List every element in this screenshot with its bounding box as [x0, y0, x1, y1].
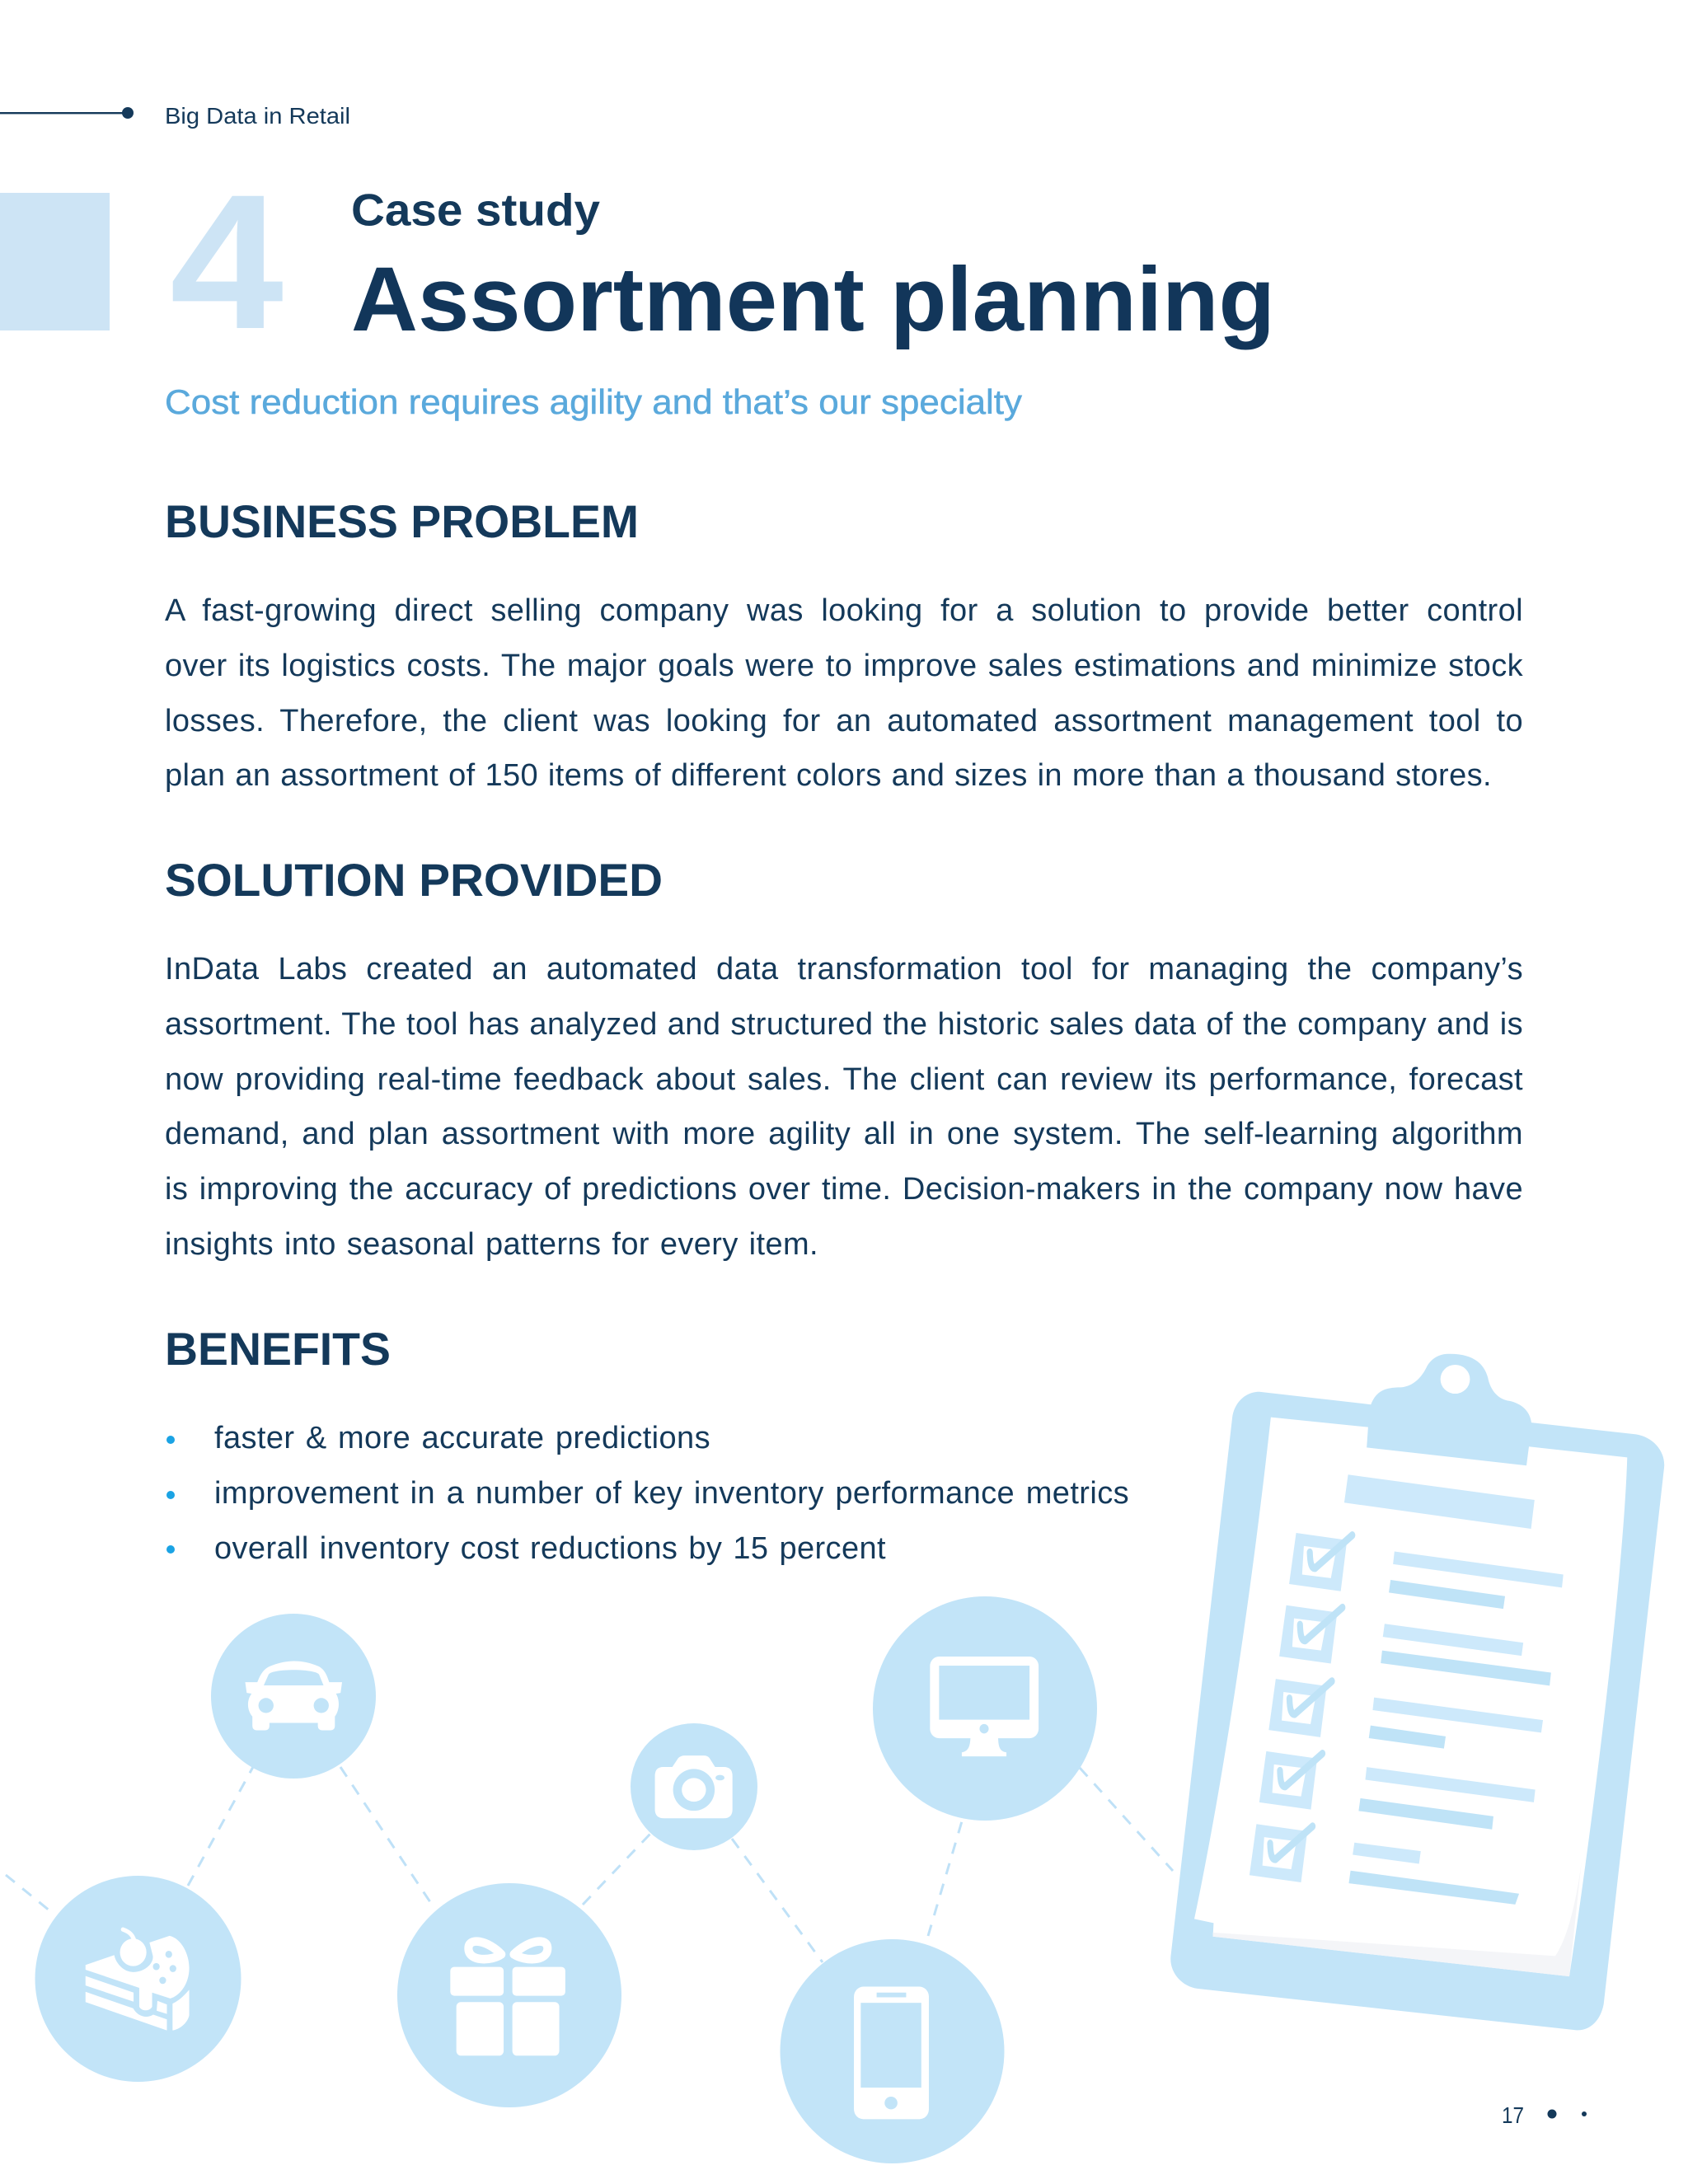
chapter marker square [0, 193, 110, 330]
text block: business problem [165, 593, 1523, 793]
text block: solution provided: insights into seasonal patterns for every item. [165, 1227, 818, 1262]
running header with line and dot [0, 103, 350, 129]
paper sheet [1194, 1418, 1627, 1976]
page number with dots [1502, 2102, 1587, 2128]
text block: solution provided: now providing real-time feedback about sales. The client can review its performance, forecast [165, 1062, 1523, 1097]
heading: business problem: BUSINESS PROBLEM [165, 495, 639, 547]
text block: business problem: losses. Therefore, the client was looking for an automated assortment management tool to [165, 704, 1523, 738]
sheet heading bar [1344, 1474, 1535, 1529]
benefits bullet list: overall inventory cost reductions by 15 percent [214, 1531, 886, 1566]
heading: benefits: BENEFITS [165, 1323, 391, 1375]
icon circle: cake [35, 1876, 241, 2082]
text block: business problem: plan an assortment of 150 items of different colors and sizes in more than a thousand stores. [165, 758, 1492, 793]
checkboxes with check marks [1250, 1533, 1353, 1882]
subtitle: Cost reduction requires agility and that’s our specialty [165, 382, 1022, 421]
icon circle: camera [631, 1723, 757, 1850]
text block: business problem: A fast-growing direct selling company was looking for a solution to provide better control [165, 593, 1523, 628]
kicker: case study: Case study [351, 185, 600, 236]
text block: solution provided: assortment. The tool has analyzed and structured the historic sales data of the company and is [165, 1007, 1523, 1042]
checklist item lines [1348, 1551, 1564, 1905]
title: Assortment planning [351, 249, 1275, 350]
text block: business problem: over its logistics costs. The major goals were to improve sales estimations and minimize stock [165, 649, 1523, 683]
dashed network connectors [6, 1767, 1173, 1962]
text block: solution provided: is improving the accuracy of predictions over time. Decision-makers in the company now have [165, 1172, 1523, 1207]
text block: solution provided: InData Labs created an automated data transformation tool for managing the company’s [165, 952, 1523, 987]
clipboard board and clip [1170, 1354, 1664, 2030]
icon circle: gift [397, 1883, 621, 2107]
text block: solution provided [165, 952, 1523, 1262]
page number with dots: 17 [1502, 2102, 1524, 2128]
benefits bullet list: improvement in a number of key inventory performance metrics [214, 1476, 1129, 1511]
clipboard illustration [1170, 1354, 1664, 2030]
icon circle: monitor [873, 1596, 1097, 1821]
benefits bullet list: faster & more accurate predictions [214, 1421, 710, 1455]
text block: solution provided: demand, and plan assortment with more agility all in one system. The self-learning algorithm [165, 1117, 1523, 1151]
chapter number: 4 [170, 155, 284, 369]
icon circle: car [211, 1614, 376, 1779]
running header with line and dot: Big Data in Retail [165, 103, 350, 129]
icon circle: smartphone [780, 1939, 1004, 2163]
heading: solution provided: SOLUTION PROVIDED [165, 854, 663, 906]
benefits bullet list [166, 1421, 1129, 1566]
